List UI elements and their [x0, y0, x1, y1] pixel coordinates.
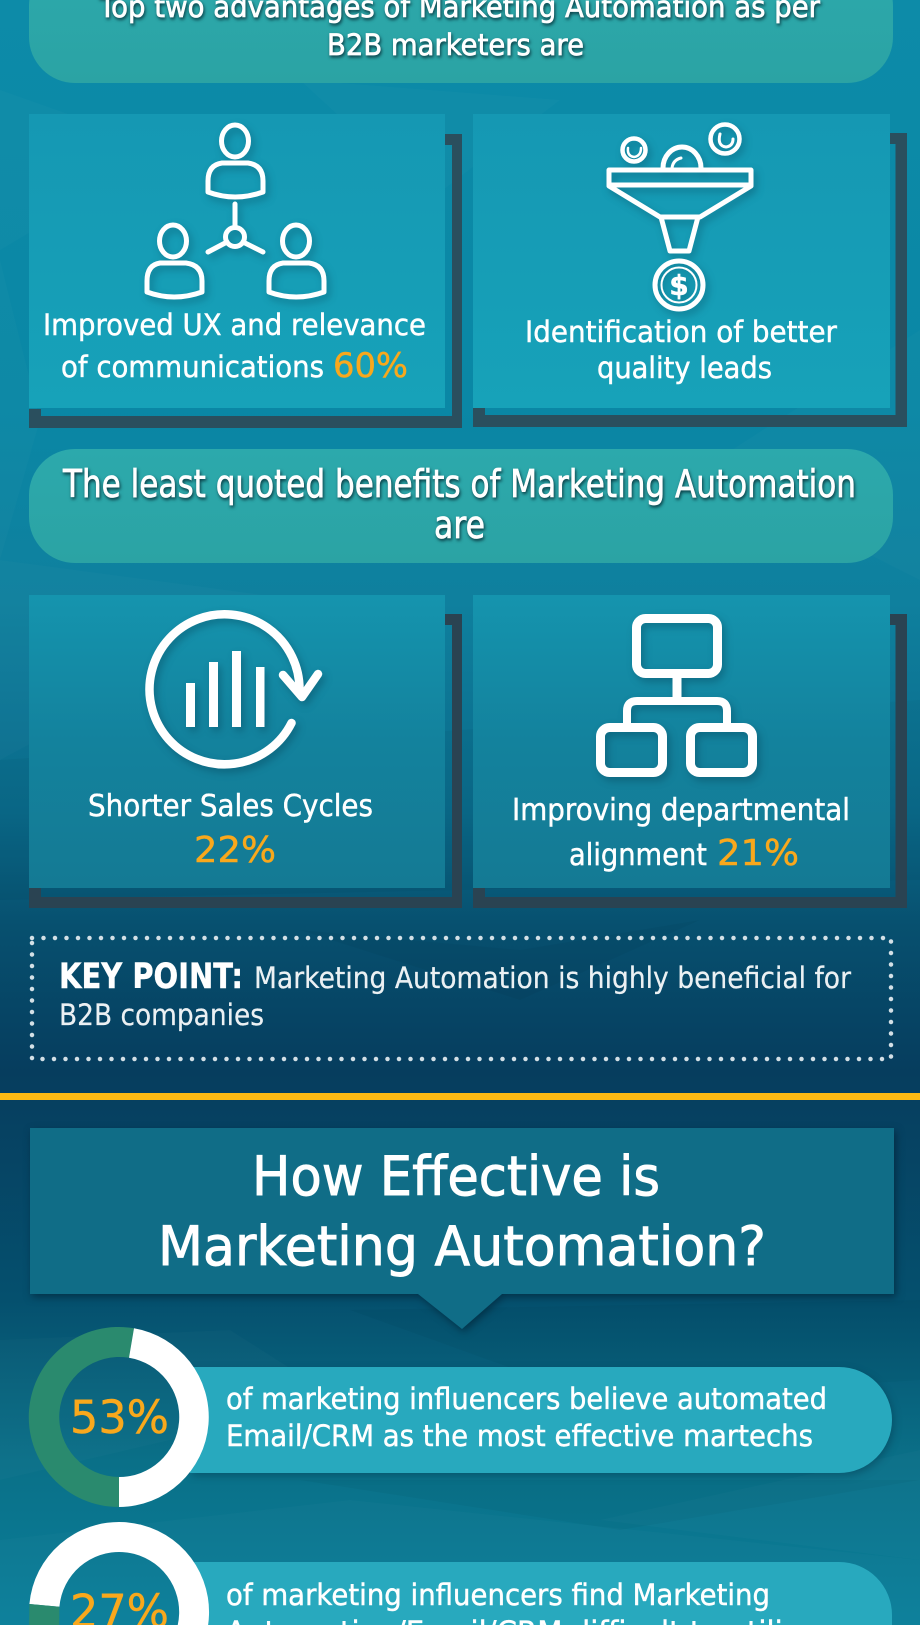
- panel: departmental alignment: [473, 595, 907, 908]
- stat text pill: 27%: of marketing influencers find Marketing: [226, 1578, 770, 1612]
- label: shorter sales cycles: 22%: [194, 830, 276, 871]
- icon: funnel with coin: $: [669, 269, 689, 302]
- label: better quality leads: Identification of better: [525, 315, 837, 349]
- icon: funnel with coin: [609, 124, 751, 309]
- label: improved UX: Improved UX and relevance: [43, 308, 426, 342]
- label: departmental alignment: [512, 793, 850, 874]
- label: departmental alignment: alignment: [569, 838, 707, 873]
- donut chart: 27%: [29, 1522, 209, 1625]
- panel: improved UX: [29, 114, 462, 428]
- title banner: how effective: [30, 1128, 894, 1329]
- heading pill: least quoted benefits: [29, 449, 893, 563]
- icon: org chart: [600, 618, 752, 772]
- stat text pill: 53%: [190, 1367, 892, 1473]
- heading pill: least quoted benefits: are: [434, 503, 485, 547]
- label: shorter sales cycles: [88, 789, 373, 871]
- label: better quality leads: quality leads: [597, 351, 772, 385]
- heading pill: top two advantages: [29, 0, 893, 83]
- panel: shorter sales cycles: [29, 595, 462, 908]
- label: improved UX: of communications: [61, 350, 324, 384]
- icon: cycle with bars: [150, 614, 318, 764]
- label: shorter sales cycles: Shorter Sales Cycles: [88, 789, 373, 824]
- stat row: 53%: [29, 1327, 892, 1507]
- label: better quality leads: [525, 315, 837, 385]
- donut chart: 53%: 53%: [70, 1391, 169, 1444]
- label: improved UX: [43, 308, 426, 386]
- icon: three connected people: [147, 125, 324, 297]
- panel: better quality leads: [473, 114, 907, 427]
- donut chart: 53%: [29, 1327, 209, 1507]
- title banner: how effective: How Effective is: [252, 1145, 660, 1208]
- label: departmental alignment: Improving departmental: [512, 793, 850, 828]
- label: departmental alignment: 21%: [717, 833, 799, 874]
- callout: key point: Marketing Automation is highly beneficial for: [254, 961, 851, 995]
- stat text pill: 53%: Email/CRM as the most effective martechs: [226, 1419, 813, 1453]
- heading pill: top two advantages: B2B marketers are: [327, 28, 584, 62]
- callout: key point: B2B companies: [59, 998, 264, 1032]
- callout: key point: [32, 938, 891, 1059]
- title banner: how effective: Marketing Automation?: [158, 1215, 766, 1278]
- callout: key point: KEY POINT:: [59, 957, 243, 997]
- stat text pill: 27%: [190, 1562, 892, 1625]
- stat text pill: 53%: of marketing influencers believe automated: [226, 1382, 827, 1416]
- stat row: 27%: [29, 1522, 892, 1625]
- label: improved UX: 60%: [333, 346, 408, 386]
